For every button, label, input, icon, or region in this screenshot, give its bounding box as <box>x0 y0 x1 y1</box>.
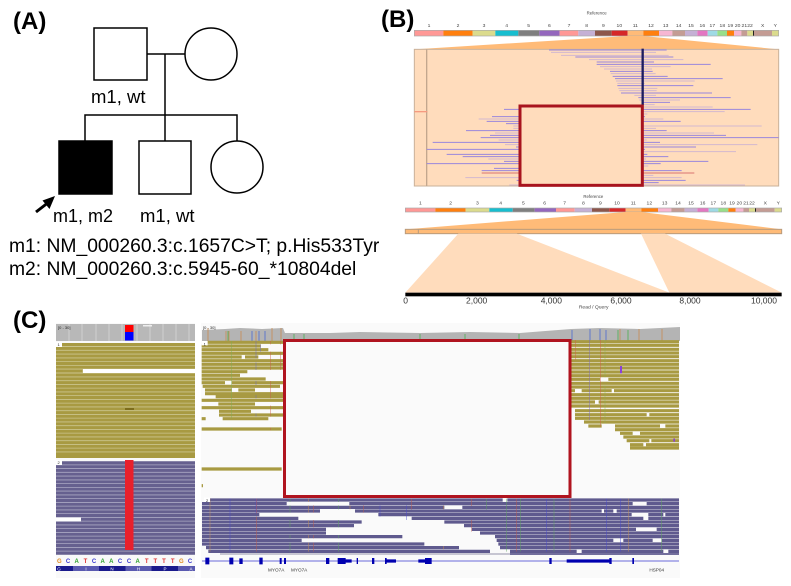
read axis labels: 0 <box>403 296 408 306</box>
affected son symbol <box>59 141 112 194</box>
reference sequence: G <box>179 559 184 565</box>
chromosome labels: 21 <box>743 201 749 207</box>
reference sequence: T <box>153 559 157 565</box>
proband genotype: m1, m2 <box>53 206 113 226</box>
read axis labels <box>403 296 777 306</box>
read axis title: Read / Query <box>579 305 609 311</box>
panel: IGV left view <box>56 323 195 578</box>
chromosome 11 expanded region <box>414 49 779 186</box>
read axis labels: 4,000 <box>541 296 562 306</box>
chromosome labels: 12 <box>647 201 652 207</box>
chromosome labels: 5 <box>522 201 525 207</box>
amino acid track: P <box>163 566 167 571</box>
chromosome labels: 20 <box>735 23 741 29</box>
chromosome labels: 14 <box>675 201 681 207</box>
coverage track: [0 - 30] <box>203 325 215 330</box>
chromosome labels: 11 <box>633 23 638 29</box>
reference sequence: A <box>136 559 141 565</box>
chromosome labels: 7 <box>568 23 571 29</box>
chromosome labels: 6 <box>543 201 546 207</box>
read axis labels: 10,000 <box>751 296 777 306</box>
read axis labels: 2,000 <box>466 296 488 306</box>
chromosome labels: 8 <box>585 23 588 29</box>
reference sequence: T <box>171 559 175 565</box>
reference sequence: C <box>92 559 97 565</box>
forward reads left of deletion <box>202 341 283 486</box>
chromosome labels: 22 <box>749 201 755 207</box>
amino acid track <box>56 566 195 571</box>
chromosome labels: 4 <box>505 23 508 29</box>
reference sequence: C <box>127 559 132 565</box>
chromosome labels: 19 <box>729 201 735 207</box>
amino acid track: A <box>189 566 193 571</box>
zoom wedge: chromosome 11 <box>405 212 782 229</box>
track labels: 2 <box>58 460 60 465</box>
pedigree connecting lines <box>85 54 237 141</box>
chromosome labels: 7 <box>563 201 566 207</box>
heading: panel C: (C) <box>13 307 46 334</box>
chromosome labels: 10 <box>617 23 622 29</box>
father genotype: m1, wt <box>91 86 145 107</box>
gene labels: HSP04 <box>649 567 664 572</box>
chromosome labels: 1 <box>419 201 422 207</box>
amino acid track: H <box>137 566 140 571</box>
arrow head: proband <box>42 196 55 209</box>
chromosome labels: 16 <box>700 201 706 207</box>
amino acid track: G <box>57 566 61 571</box>
chromosome labels: 12 <box>648 23 654 29</box>
panel background <box>201 323 680 578</box>
chromosome labels: 2 <box>457 23 460 29</box>
read bar <box>405 293 782 296</box>
alignment ribbon: right segment <box>641 234 782 293</box>
father symbol <box>94 28 147 80</box>
mother symbol <box>185 28 237 80</box>
reference sequence: A <box>75 559 80 565</box>
track labels: 1 <box>58 342 60 347</box>
highlight box: deletion <box>520 106 642 185</box>
forward reads right of deletion <box>571 340 679 448</box>
chromosome labels: 6 <box>548 23 551 29</box>
coverage track <box>56 324 195 341</box>
chromosome labels: 18 <box>720 23 725 29</box>
variant descriptions: m1: NM_000260.3:c.1657C>T; p.His533Tyr <box>9 236 380 257</box>
daughter symbol <box>211 141 263 193</box>
reference sequence: A <box>101 559 106 565</box>
chromosome labels: 1 <box>428 23 431 29</box>
chromosome labels: 21 <box>742 23 747 29</box>
gene labels: MYO7A <box>291 567 308 572</box>
coverage track: [0 - 30] <box>58 325 70 330</box>
chromosome labels: 19 <box>728 23 733 29</box>
panel: IGV right view <box>201 323 680 578</box>
arrow: proband <box>36 204 47 212</box>
reference sequence: T <box>145 559 149 565</box>
unaffected son symbol <box>139 141 191 194</box>
chromosome ideogram <box>414 30 779 36</box>
reference sequence: G <box>57 559 62 565</box>
reference sequence <box>57 559 193 565</box>
gene labels <box>268 567 664 572</box>
reference sequence: C <box>118 559 123 565</box>
track labels <box>56 342 62 465</box>
chromosome labels: 8 <box>582 201 585 207</box>
alignment ribbon: left segment <box>405 234 669 293</box>
chromosome ideogram <box>405 208 782 212</box>
forward reads <box>56 343 195 458</box>
chromosome labels: 13 <box>663 23 669 29</box>
reference sequence: T <box>84 559 88 565</box>
chromosome labels: 3 <box>483 23 486 29</box>
chromosome labels: 20 <box>737 201 742 207</box>
chromosome labels: 3 <box>476 201 479 207</box>
gene track <box>202 558 679 572</box>
chromosome labels: 2 <box>449 201 452 207</box>
chromosome labels: 22 <box>747 23 753 29</box>
chromosome 11 track <box>405 229 782 234</box>
variant column <box>125 460 134 550</box>
highlight box: deletion <box>284 340 570 496</box>
chromosome labels: 4 <box>499 201 502 207</box>
chromosome labels <box>419 201 781 207</box>
variant descriptions: m2: NM_000260.3:c.5945-60_*10804del <box>9 259 356 280</box>
chromosome labels: 17 <box>711 201 716 207</box>
panel background <box>56 323 195 578</box>
chromosome labels: 18 <box>721 201 726 207</box>
zoom wedge: chromosome 11 <box>414 36 779 49</box>
chromosome labels <box>428 23 778 29</box>
chromosome labels: 11 <box>631 201 636 207</box>
chromosome labels: 14 <box>676 23 682 29</box>
chromosome labels: X <box>761 23 765 29</box>
reference sequence: C <box>188 559 193 565</box>
read axis labels: 8,000 <box>679 296 701 306</box>
chromosome labels: Y <box>777 201 781 207</box>
reference sequence: A <box>109 559 114 565</box>
reference title: Reference <box>587 11 607 16</box>
panel: split-read alignment <box>414 11 779 186</box>
chromosome labels: Y <box>774 23 778 29</box>
sibling genotype: m1, wt <box>140 205 194 226</box>
panel: pedigree <box>36 28 263 226</box>
chromosome labels: 13 <box>662 201 668 207</box>
reference title: Reference <box>583 194 604 199</box>
reverse reads across deletion: 2 <box>206 498 209 503</box>
variant descriptions <box>9 236 380 280</box>
chromosome labels: 9 <box>602 23 605 29</box>
gene labels: MYO7A <box>268 567 285 572</box>
chromosome labels: 5 <box>527 23 530 29</box>
amino acid track: I <box>85 566 87 571</box>
amino acid track: N <box>110 566 114 571</box>
chromosome labels: 17 <box>710 23 715 29</box>
centromere line <box>425 49 429 186</box>
reference sequence: T <box>162 559 166 565</box>
chromosome labels: 16 <box>700 23 705 29</box>
read axis labels: 6,000 <box>610 296 632 306</box>
dark stacked breakpoint column <box>639 49 646 105</box>
heading: panel A: (A) <box>13 8 46 35</box>
aligned read segments <box>427 50 779 185</box>
chromosome labels: 15 <box>688 201 694 207</box>
forward reads left of deletion: 1 <box>204 342 207 347</box>
reverse reads across deletion <box>202 498 679 554</box>
reference sequence: C <box>66 559 71 565</box>
chromosome labels: 10 <box>614 201 620 207</box>
chromosome labels: X <box>764 201 768 207</box>
coverage track <box>202 325 680 341</box>
heading: panel B: (B) <box>381 6 414 33</box>
reverse reads <box>56 461 195 555</box>
chromosome labels: 9 <box>599 201 602 207</box>
panel: read versus query plot <box>403 194 782 311</box>
chromosome labels: 15 <box>688 23 694 29</box>
